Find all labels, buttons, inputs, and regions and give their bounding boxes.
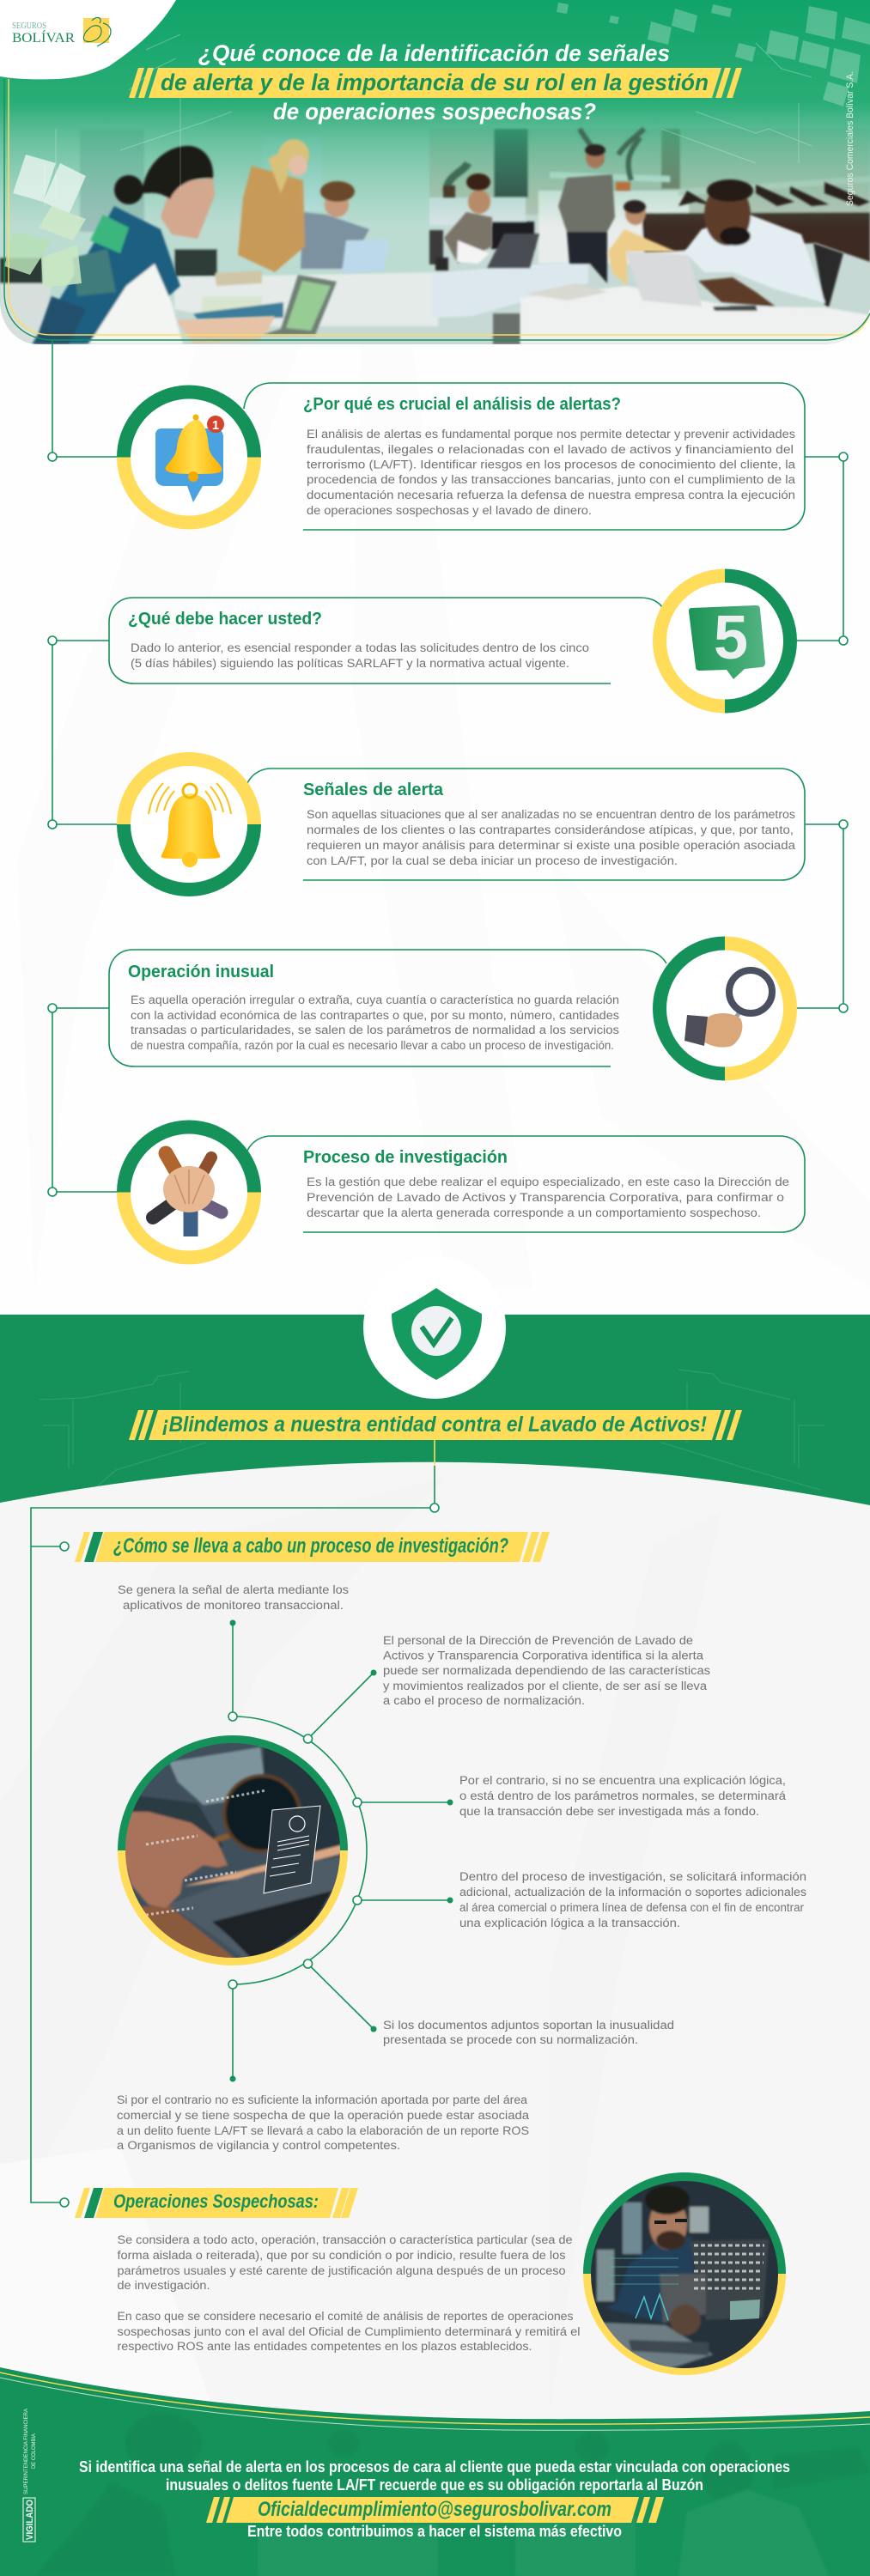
banner: operaciones sospechosas [75, 2188, 358, 2218]
panel: señales de alerta [124, 759, 805, 890]
text: step one [118, 1583, 349, 1612]
text: step five: Si los documentos adjuntos soportan la inusualidad [383, 2019, 674, 2032]
body text: Prevención de Lavado de Activos y Transparencia Corporativa, para confirmar o [307, 1191, 784, 1204]
body text [307, 428, 796, 517]
body text: El análisis de alertas es fundamental porque nos permite detectar y prevenir actividades [307, 428, 795, 440]
body text: con la actividad económica de las contrapartes o que, por su monto, número, cantidades [131, 1009, 619, 1022]
text: operaciones sospechosas definition: de investigación. [117, 2279, 210, 2292]
banner: operaciones sospechosas: Operaciones Sospechosas: [113, 2190, 319, 2212]
circuit lines [45, 34, 812, 206]
footer message: Si identifica una señal de alerta en los procesos de cara al cliente que pueda estar vinculada con operaciones [79, 2458, 790, 2476]
photo circle: analyst with data screens [583, 2172, 786, 2379]
vigilado note: VIGILADO [25, 2500, 35, 2540]
green gradient overlay [0, 0, 870, 220]
text: step six: comercial y se tiene sospecha de que la operación puede estar asociada [117, 2109, 530, 2122]
photo: pale green pixel squares [4, 155, 86, 288]
body text: de nuestra compañía, razón por la cual es necesario llevar a cabo un proceso de investigación. [131, 1039, 614, 1052]
badge: shield check [363, 1256, 506, 1399]
footer message [79, 2458, 790, 2494]
text: step three: que la transacción debe ser investigada más a fondo. [459, 1805, 759, 1818]
heading: Operación inusual [128, 963, 274, 981]
photo: man at laptop [520, 179, 870, 344]
body text [307, 808, 796, 867]
photo: foreground woman [32, 146, 337, 344]
text: step six: a Organismos de vigilancia y control competentes. [117, 2139, 400, 2152]
footer message: inusuales o delitos fuente LA/FT recuerde que es su obligación reportarla al Buzón [166, 2476, 703, 2494]
photo: office wall left [0, 129, 438, 344]
body text: requieren un mayor análisis para determinar si existe una posible operación asociada [307, 839, 796, 852]
ring and number five icon [660, 575, 790, 706]
pixel squares decoration [557, 3, 870, 106]
heading: Proceso de investigación [303, 1148, 508, 1167]
faint photo silhouette [34, 2413, 870, 2576]
text: step two: puede ser normalizada dependiendo de las características [383, 1664, 710, 1677]
text: step six [117, 2093, 530, 2152]
text: step four: Dentro del proceso de investigación, se solicitará información [459, 1870, 806, 1883]
hero photo banner [0, 0, 870, 344]
vigilado note: SUPERINTENDENCIA FINANCIERA [24, 2409, 29, 2494]
panel: operación inusual [109, 943, 790, 1073]
body text: Dado lo anterior, es esencial responder a todas las solicitudes dentro de los cinco [131, 641, 589, 654]
body text: transadas o particularidades, se salen de los parámetros de normalidad a los servicios [131, 1024, 619, 1036]
body text: documentación necesaria refuerza la defensa de nuestra empresa contra la ejecución [307, 489, 795, 501]
heading: ¿Qué debe hacer usted? [128, 610, 322, 629]
ring and ringing bell icon [124, 759, 254, 890]
text: step two: y movimientos realizados por el cliente, de ser así se lleva [383, 1680, 708, 1692]
text: step one: aplicativos de monitoreo transaccional. [123, 1599, 344, 1612]
body text [131, 641, 589, 670]
body text: con LA/FT, por la cual se deba iniciar un proceso de investigación. [307, 854, 678, 867]
panel: qué debe hacer usted [109, 575, 790, 706]
panel: proceso de investigación [124, 1127, 805, 1257]
ring and magnifier icon [660, 943, 790, 1073]
section band [0, 1256, 870, 1505]
hero frame lines [4, 79, 870, 340]
body text [131, 993, 619, 1052]
text: comité de análisis: respectivo ROS ante las entidades competentes en los plazos establecidos. [117, 2340, 532, 2353]
text: step six: a un delito fuente LA/FT se llevará a cabo la elaboración de un reporte ROS [117, 2124, 529, 2137]
panel: por qué es crucial [124, 383, 805, 530]
logo: BOLÍVAR [12, 29, 75, 46]
banner: blindemos: ¡Blindemos a nuestra entidad contra el Lavado de Activos! [162, 1413, 707, 1437]
text: step four: una explicación lógica a la transacción. [459, 1917, 680, 1929]
body text: normales de los clientes o las contrapartes considerándose atípicas, y que, por tanto, [307, 823, 794, 836]
connector left timeline [31, 1440, 439, 2207]
body text: Es aquella operación irregular o extraña, cuya cuantía o característica no guarda relación [131, 993, 619, 1006]
photo: office right background [429, 129, 870, 264]
banner: cómo se lleva a cabo [75, 1532, 550, 1562]
body text: (5 días hábiles) siguiendo las políticas SARLAFT y la normativa actual vigente. [131, 657, 569, 670]
ring and joined hands icon [124, 1127, 254, 1257]
text: step three [459, 1774, 787, 1818]
text: comité de análisis: sospechosas junto con el aval del Oficial de Cumplimiento determinará y remitirá el [117, 2325, 581, 2338]
banner: cómo se lleva a cabo: ¿Cómo se lleva a cabo un proceso de investigación? [113, 1534, 508, 1558]
logo [0, 0, 176, 79]
photo content [125, 1743, 340, 1958]
text: step four [459, 1870, 806, 1929]
text: step four: adicional, actualización de la información o soportes adicionales [459, 1886, 806, 1899]
body text: procedencia de fondos y las transacciones bancarias, junto con el cumplimiento de la [307, 473, 796, 486]
photo content [591, 2181, 778, 2368]
footer closing line: Entre todos contribuimos a hacer el sistema más efectivo [247, 2523, 622, 2540]
text: step three: o está dentro de los parámetros normales, se determinará [459, 1789, 787, 1802]
photo: desks and table [174, 260, 588, 344]
text: step six: Si por el contrario no es suficiente la información aportada por parte del área [117, 2093, 528, 2106]
text: operaciones sospechosas definition [117, 2233, 572, 2292]
circuit decoration [40, 1370, 824, 1498]
text: step two: a cabo el proceso de normalización. [383, 1694, 585, 1707]
text: step five [383, 2019, 674, 2046]
text: operaciones sospechosas definition: forma aislada o reiterada), que por su condición o por indicio, resulte fuera de los [117, 2249, 566, 2262]
text: step one: Se genera la señal de alerta mediante los [118, 1583, 349, 1596]
text: operaciones sospechosas definition: Se considera a todo acto, operación, transacción o característica particular (sea de [117, 2233, 572, 2246]
photo: standing man [558, 144, 615, 283]
process arc and connectors [228, 1619, 453, 2081]
body text [307, 1176, 789, 1219]
footer background [0, 2367, 870, 2576]
vigilado note [23, 2409, 37, 2542]
body text: de operaciones sospechosas y el lavado de dinero. [307, 504, 592, 517]
text: comité de análisis: En caso que se considere necesario el comité de análisis de reportes de operaciones [117, 2310, 574, 2323]
heading: ¿Por qué es crucial el análisis de alertas? [303, 395, 621, 414]
photo: seated woman with laptop [435, 173, 539, 270]
text: step five: presentada se procede con su normalización. [383, 2033, 638, 2046]
title: de operaciones sospechosas? [273, 99, 596, 125]
title highlight band: de alerta y de la importancia de su rol en la gestión [161, 70, 709, 95]
text: comité de análisis [117, 2310, 581, 2353]
photo: woman with blazer and man in denim [238, 139, 389, 273]
text: step three: Por el contrario, si no se encuentra una explicación lógica, [459, 1774, 786, 1787]
photo: plants and chevrons [443, 129, 870, 206]
banner: email: Oficialdecumplimiento@segurosbolivar.com [258, 2498, 611, 2521]
ring and bell icon [124, 392, 254, 522]
logo: SEGUROS [12, 21, 46, 31]
text: step two [383, 1634, 710, 1707]
text: step four: al área comercial o primera línea de defensa con el fin de encontrar [459, 1901, 804, 1914]
body text: descartar que la alerta generada corresponde a un comportamiento sospechoso. [307, 1206, 761, 1219]
body text: terrorismo (LA/FT). Identificar riesgos en los procesos de conocimiento del cliente, la [307, 459, 796, 471]
connectors upper section [48, 340, 848, 1196]
body text: Es la gestión que debe realizar el equipo especializado, en este caso la Dirección de [307, 1176, 789, 1188]
body text: Son aquellas situaciones que al ser analizadas no se encuentran dentro de los parámetros [307, 808, 795, 821]
legal vertical note: Seguros Comerciales Bolívar S.A. [845, 71, 855, 206]
text: step two: El personal de la Dirección de Prevención de Lavado de [383, 1634, 693, 1647]
vigilado note: DE COLOMBIA [32, 2433, 37, 2469]
heading: Señales de alerta [303, 781, 444, 799]
text: operaciones sospechosas definition: parámetros usuales y esté carente de justificación alguna después de un proceso [117, 2264, 565, 2277]
ring and bell icon: 1 [212, 418, 219, 433]
title [129, 40, 742, 125]
body text: fraudulentas, ilegales o relacionadas con el lavado de activos y financiamiento del [307, 443, 794, 456]
title: ¿Qué conoce de la identificación de señales [198, 40, 670, 66]
text: step two: Activos y Transparencia Corporativa identifica si la alerta [383, 1649, 704, 1662]
photo circle: magnifier and laptop [112, 1730, 356, 1971]
photo: man in yellow shirt [608, 200, 676, 286]
ring and number five icon: 5 [714, 604, 748, 672]
